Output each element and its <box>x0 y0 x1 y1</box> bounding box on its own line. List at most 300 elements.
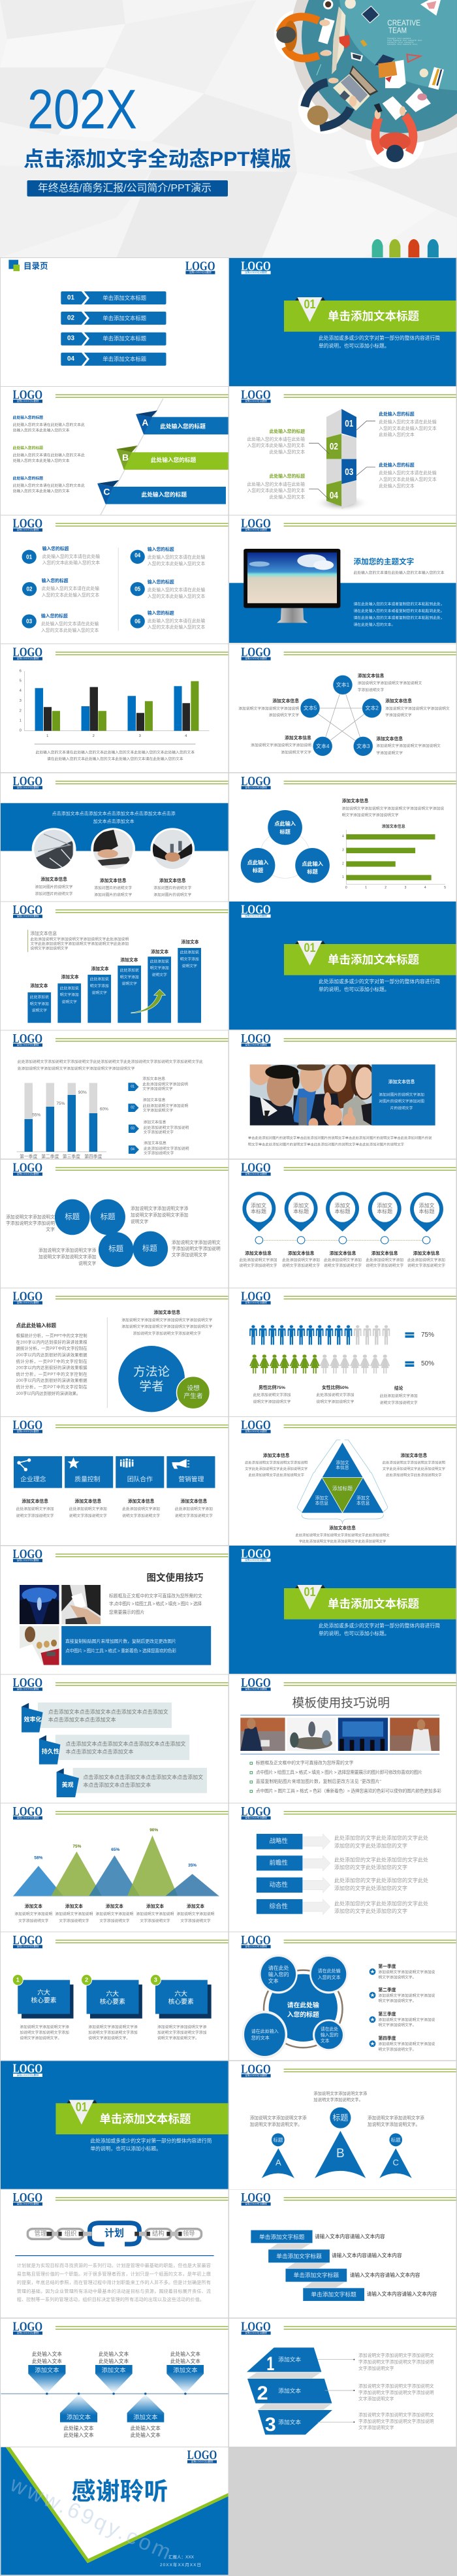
left article: 根据统计分析，一页PPT中的文字控制 <box>16 1333 87 1338</box>
pin labels: 添加文本 <box>133 2413 157 2421</box>
header <box>241 388 456 403</box>
circle labels <box>247 821 323 875</box>
header: 设有LOGO可以删除 <box>245 528 267 531</box>
mountain labels <box>14 1903 215 1923</box>
section content: 单的说明，也可以添加小标题。 <box>319 1630 390 1637</box>
header: 设有LOGO可以删除 <box>245 1043 267 1047</box>
methodology circles <box>107 1318 210 1412</box>
triangle labels <box>315 1459 370 1506</box>
ribbon text: 本点击添加文本点击添加文本 <box>48 1716 116 1723</box>
left text blocks: 此处输入您的文本请在此处输入您的文本此 <box>13 483 85 488</box>
monitor body text: 请在此处输入您的文本。 <box>354 622 395 627</box>
circle descriptions: 文字添加说明文字 <box>172 1252 207 1258</box>
circle numbers <box>26 552 140 625</box>
intro text: 此处添加说明文字添加说明文字添加说明文字此处添加说明文字此处添加说明文字添加说明文字添加说明文字此 <box>18 1059 203 1064</box>
header: LOGO <box>241 1933 271 1948</box>
panel: triangle slide <box>241 1418 456 1544</box>
percent labels: 60% <box>100 1107 108 1112</box>
panel: pentagram slide <box>238 645 456 756</box>
plan paragraph: 易忽略且管理价值的一个职能。对于很多管理者而言，计划只是一个纸面的文本，是年初上缴 <box>17 2271 211 2277</box>
cube text left: 入您的文本此处输入您的文本 <box>247 487 305 493</box>
flag labels: 此处输入您的标题 <box>151 456 197 463</box>
badge text: 文字添加说明文字 <box>143 1107 173 1113</box>
tile descriptions: 添加文本信息 <box>181 1498 207 1504</box>
card numbers: 3 <box>154 1977 157 1983</box>
pin labels: 本标题 <box>419 1208 435 1215</box>
step bar text: 此处添加说 <box>60 985 79 990</box>
photo info text: 添加对图片的说明文字添加 <box>379 1092 424 1097</box>
quarter list: 添加说明文字添加说明文字添加说 <box>378 1993 435 1998</box>
section logo: LOGO <box>241 259 271 273</box>
ribbon text: 本点击添加文本点击添加文本 <box>83 1782 151 1788</box>
ribbon text: 本点击添加文本点击添加文本 <box>65 1748 133 1755</box>
cover slide <box>0 0 457 257</box>
header <box>13 388 228 403</box>
timeline pins <box>1 2365 228 2422</box>
tile labels: 企业理念 <box>20 1475 46 1483</box>
panel: numbered blocks slide <box>241 2320 456 2436</box>
circle descriptions <box>6 1205 221 1266</box>
cluster labels: 入您的标题 <box>287 2010 319 2019</box>
header: 设有LOGO可以删除 <box>17 1172 39 1175</box>
step bar text: 说明文字 <box>92 990 107 995</box>
timeline text: 此处输入文本 <box>170 2351 200 2357</box>
pin descriptions: 添加文本信息 <box>245 1250 272 1256</box>
cube text right: 此处输入您的标题 <box>379 462 415 468</box>
card descriptions: 说明文字添加说明文字。 <box>88 2035 130 2040</box>
figure descriptions <box>250 2091 424 2127</box>
cube text left <box>247 429 305 500</box>
node descriptions: 添加说明文字添加说明文字添加说明 <box>251 743 311 748</box>
header <box>241 1290 456 1305</box>
circle descriptions: 文字 <box>46 1226 55 1232</box>
cluster labels: 文本 <box>268 1978 279 1984</box>
step titles <box>30 939 199 988</box>
quarter list: 添加说明文字添加说明文字添加说 <box>378 1969 435 1974</box>
circle labels: 点此输入 <box>247 859 268 866</box>
node labels: 文本2 <box>365 704 379 711</box>
section content: 单击添加文本标题 <box>328 953 419 966</box>
timeline text: 此处输入文本 <box>32 2351 62 2357</box>
header: LOGO <box>13 774 42 789</box>
photo captions: 添加文本信息 <box>159 877 186 883</box>
info text: 添加文本信息 <box>342 798 369 804</box>
monitor body text: 请在此处输入您的文本或者复制您的文本粘贴到此处， <box>354 615 445 620</box>
box labels: 前瞻性 <box>270 1859 289 1867</box>
block descriptions: 文字添加说明文字 <box>358 2396 394 2402</box>
header: LOGO <box>241 388 271 402</box>
tile descriptions <box>16 1498 213 1518</box>
left article: 在200字以内内达到很好的演讲效果根 <box>16 1339 87 1345</box>
step titles: 添加文本 <box>91 966 109 971</box>
right points text: 入您的文本此处输入您的文本 <box>148 593 205 599</box>
ribbon labels: 持久性 <box>42 1748 59 1755</box>
cluster labels: 请在此处输 <box>287 2000 319 2010</box>
triangle labels: 添加文 <box>315 1495 328 1501</box>
left text blocks: 此处输入您的文本请在此处输入您的文本此 <box>13 422 85 427</box>
triangle labels: 添加标题 <box>332 1485 353 1492</box>
step bar text: 此处添加说 <box>30 994 49 1000</box>
mountain labels: 文字添加说明文字 <box>99 1918 130 1923</box>
quarter labels: 第一季度 <box>20 1154 37 1159</box>
round photos <box>32 828 195 871</box>
badge text: 添加文本信息 <box>143 1098 166 1103</box>
section content <box>241 902 456 992</box>
panel: progress bars slide <box>13 1032 228 1159</box>
triangle labels: 添加文 <box>356 1495 370 1501</box>
stair labels: 单击添加文字标题 <box>294 2272 339 2279</box>
pin labels: 添加文本 <box>35 2366 59 2373</box>
quarter labels <box>20 1154 102 1159</box>
horizontal bar chart: 0 <box>345 886 347 890</box>
tips text: 字,点中图片 > 绘图工具 > 格式 > 填充 > 图片 > 选择 <box>109 1601 202 1606</box>
usage tips: 点中图片 > 绘图工具 > 格式 > 填充 > 图片 > 选择您需要展示的图片即可修改你喜欢的图片 <box>256 1769 422 1775</box>
header: 设有LOGO可以删除 <box>17 2202 39 2206</box>
timeline text: 此处输入文本 <box>131 2425 161 2432</box>
contents item 02 <box>61 311 166 325</box>
left article: 据统计分析，一页PPT中的文字控制在 <box>16 1345 87 1351</box>
panel: team photo slide <box>241 1032 456 1147</box>
pin descriptions: 此处添加说明文字添加 <box>366 1257 403 1262</box>
badge text: 此处添加说明文字添加说明 <box>144 1125 189 1130</box>
tips text: 标题框及正文框中的文字可直接改为您所需的文 <box>109 1593 202 1599</box>
cluster labels <box>251 1965 341 2044</box>
cluster labels: 输入您的 <box>268 1971 289 1978</box>
chain labels: 组织 <box>65 2230 76 2237</box>
circle labels: 标题 <box>108 1245 124 1253</box>
triangle descriptions: 添加文本信息 <box>263 1452 290 1458</box>
cube text right <box>379 411 437 489</box>
bar chart: 1 <box>20 719 22 723</box>
left points text: 此处输入您的文本请在此处输 <box>41 621 99 627</box>
cover subtitle bar <box>27 180 228 197</box>
quarter list <box>378 1963 435 2052</box>
header <box>241 645 456 660</box>
card labels: 核心要素 <box>31 1996 57 2004</box>
header: LOGO <box>241 2062 271 2077</box>
blue circles <box>55 1199 168 1267</box>
info text: 明文字添加说明文字添加说明文字 <box>342 813 399 818</box>
figure descriptions: 添加说明文字添加说明文字添 <box>313 2091 368 2096</box>
photo captions: 添加对图片的说明文字 <box>94 892 132 897</box>
tile labels: 团队合作 <box>127 1475 153 1483</box>
step bar text: 此处添加说 <box>180 950 199 955</box>
ratio captions: 女性比例50% <box>322 1384 349 1390</box>
timeline text: 此处输入文本 <box>63 2432 94 2438</box>
panel: column chart slide <box>13 645 228 762</box>
stair labels: 单击添加文字标题 <box>311 2291 356 2298</box>
circle labels: 标题 <box>307 868 318 875</box>
header: LOGO <box>241 1418 271 1433</box>
step bar text: 明文字添加 <box>30 1001 49 1006</box>
tile descriptions: 添加文本信息 <box>74 1498 101 1504</box>
chain labels <box>35 2228 195 2239</box>
panel: monitor slide <box>229 517 456 643</box>
timeline text <box>32 2351 200 2438</box>
header: LOGO <box>13 1032 42 1046</box>
header <box>241 2191 456 2206</box>
ratio captions: 此处添加说明文字添加 <box>316 1392 355 1397</box>
logo: 设有LOGO可以删除 <box>189 270 212 274</box>
tips text <box>109 1593 202 1615</box>
stair shapes <box>251 2230 364 2301</box>
panel: image tips slide <box>13 1547 228 1665</box>
section content: LOGO <box>13 2062 42 2076</box>
panel: stair steps slide <box>241 2191 456 2301</box>
right text: 添加说明文字添加说明文字添加说明文字添加说明文字 <box>121 1317 213 1322</box>
left points text <box>41 546 100 633</box>
cover subtitle bar: 年终总结/商务汇报/公司简介/PPT演示 <box>38 182 212 194</box>
node labels: 文本5 <box>304 704 317 711</box>
card labels: 六大 <box>174 1989 187 1998</box>
header: 设有LOGO可以删除 <box>17 399 39 402</box>
flag labels: C <box>103 486 110 497</box>
header: LOGO <box>13 1290 42 1304</box>
ribbon labels: 美观 <box>62 1781 74 1788</box>
step bar text: 说明文字 <box>182 963 197 968</box>
block labels: 1 <box>266 2353 274 2375</box>
triangle descriptions: 此处添加说明文字添加说明文字添加说明 <box>245 1460 307 1465</box>
triangle labels: 本信息 <box>356 1500 370 1506</box>
triangle descriptions: 此处添加说明文字此处添加说明文字 <box>386 1473 442 1478</box>
card descriptions: 添加说明文字添加说明文字添 <box>20 2025 69 2030</box>
arrow text: 添加您的文字此处添加您的文字 <box>334 1864 407 1870</box>
header: LOGO <box>13 1676 42 1690</box>
bar chart <box>20 669 210 744</box>
plan paragraph: 管理的基础，因为企业管理所有活动中最基本的活动是目标与资源，围绕着目标展开责任、流 <box>17 2288 211 2294</box>
triangle descriptions: 文字此处添加说明文字此处添加说明文字 <box>245 1466 307 1471</box>
header: 设有LOGO可以删除 <box>245 1816 267 1819</box>
numbered blocks <box>247 2347 355 2435</box>
figure labels: 标题 <box>391 2136 401 2143</box>
circle labels: 标题 <box>253 867 263 873</box>
header <box>241 1804 456 1819</box>
pin labels: 添加文 <box>377 1202 392 1209</box>
usage tips: 标题框及正文框中的文字可直接改为您所需的文字 <box>256 1760 354 1765</box>
cover year: 202X <box>27 78 137 141</box>
band text: 加文本点击添加文本 <box>93 818 134 824</box>
header <box>241 2320 456 2335</box>
pin descriptions: 说明文字添加说明文字 <box>240 1263 277 1268</box>
header <box>13 1032 228 1047</box>
panel: template usage slide <box>240 1676 456 1794</box>
presenter info: 20XX年XX月XX日 <box>160 2562 201 2568</box>
left points text: 此处输入您的文本请在此处输 <box>42 585 99 591</box>
card numbers: 2 <box>85 1977 88 1983</box>
quarter labels: 第四季度 <box>84 1154 102 1159</box>
horizontal bar chart: 1 <box>342 875 344 879</box>
header: LOGO <box>13 388 42 402</box>
step bar text: 明文字添加 <box>60 992 79 998</box>
left text blocks <box>13 415 85 493</box>
blue band <box>1 803 228 851</box>
panel: section divider 2 <box>229 902 456 1030</box>
right text: 添加文本信息 <box>153 1309 180 1315</box>
cube text right: 此处输入您的文本 <box>379 483 415 489</box>
section content: 单的说明，也可以添加小标题。 <box>90 2145 161 2152</box>
left article: 200字以内内达到很好的演讲效果。 <box>16 1390 80 1396</box>
node descriptions: 添加说明文字文字 <box>269 713 299 718</box>
pin labels <box>35 2366 198 2421</box>
cube text right: 入您的文本此处输入您的文本 <box>379 425 437 431</box>
pin descriptions: 说明文字添加说明文字 <box>366 1263 403 1268</box>
quarter list: 第二季度 <box>378 1987 396 1993</box>
circle numbers: 06 <box>134 618 140 625</box>
ribbon text: 点击添加文本点击添加文本点击添加文本点击添加文 <box>65 1740 185 1747</box>
pin descriptions: 添加文本信息 <box>413 1250 440 1256</box>
number circles <box>22 547 145 631</box>
photo info text: 添加文本信息 <box>388 1079 415 1084</box>
figure labels <box>273 2113 401 2168</box>
panel: people ratio slide <box>241 1290 456 1405</box>
band text: 点击添加文本点击添加文本点击添加文本点击添加文本点击添 <box>52 810 176 817</box>
team photo <box>249 1064 435 1126</box>
tile descriptions: 此处添加说明文字添加 <box>175 1507 213 1512</box>
section content: 此处添加或多或少的文字对第一部分的整体内容进行简 <box>319 978 440 985</box>
contents item 01: 单击添加文本标题 <box>102 295 147 301</box>
header: 设有LOGO可以删除 <box>245 2074 267 2077</box>
section title: 单击添加文本标题 <box>328 310 419 323</box>
cube text left: 此处输入您的文本 <box>270 449 305 455</box>
block labels <box>257 2353 301 2436</box>
photo captions: 添加对图片的说明文字 <box>153 892 191 897</box>
photo captions: 添加文本信息 <box>100 877 127 883</box>
presenter info <box>160 2554 201 2568</box>
header <box>241 1161 456 1176</box>
percent labels: 75% <box>56 1101 65 1106</box>
plan paragraph: 的提案，年底总结的参照，而在管理过程中用计划职能来工作的人并不多。但是计划确是所有 <box>17 2279 211 2285</box>
header: LOGO <box>13 2320 42 2334</box>
chain labels: 计划 <box>104 2228 124 2239</box>
node descriptions: 添加文本信息 <box>358 673 385 678</box>
panel: cube column slide <box>241 388 456 512</box>
cube text left: 入您的文本此处输入您的文本 <box>247 442 305 448</box>
badge numbers: 03 <box>131 1127 134 1131</box>
section content: 此处添加或多或少的文字对第一部分的整体内容进行简 <box>90 2138 212 2144</box>
header: LOGO <box>241 1290 271 1304</box>
slide heading: 图文使用技巧 <box>146 1572 204 1584</box>
header: LOGO <box>13 1804 42 1819</box>
usage tips: 点中图片 > 图片工具 > 格式 > 色彩（重新着色）> 选择您喜欢的色彩可以使你的图片颜色更加多彩 <box>256 1787 441 1794</box>
band text <box>52 810 176 824</box>
card numbers <box>16 1977 157 1983</box>
card descriptions: 加说明文字添加说明文字添加 <box>157 2030 207 2035</box>
illustration: team around round table <box>274 0 457 169</box>
figure labels: 标题 <box>332 2113 348 2123</box>
triangle descriptions: 添加文本信息 <box>401 1452 427 1458</box>
header <box>241 1418 456 1433</box>
card descriptions: 添加说明文字添加说明文字添 <box>157 2025 207 2030</box>
node descriptions: 字添加说明文字 <box>385 713 412 718</box>
arrow text: 此处添加您的文字此处添加您的文字此处 <box>334 1834 428 1841</box>
header: LOGO <box>13 517 42 531</box>
header <box>13 1804 228 1819</box>
badge numbers: 01 <box>131 1085 134 1089</box>
arrow text: 添加您的文字此处添加您的文字 <box>334 1842 407 1849</box>
badge text: 文字添加说明文字 <box>142 1086 173 1092</box>
box labels: 战略性 <box>270 1837 289 1845</box>
stair text: 请输入文本内容请输入文本内容 <box>350 2272 420 2278</box>
box labels: 动态性 <box>270 1881 289 1889</box>
panel: ABC figures slide <box>241 2062 456 2178</box>
section content: 此处添加或多或少的文字对第一部分的整体内容进行简 <box>319 1622 440 1629</box>
bar chart: 2 <box>93 734 95 738</box>
contents item 02: 02 <box>67 315 74 321</box>
triangle descriptions <box>245 1452 445 1544</box>
badge numbers: 02 <box>131 1106 134 1110</box>
photo captions: 添加对图片的说明文字 <box>35 885 73 890</box>
photo caption: 明文字单击此处添加对图片的说明文字单击此处添加对图片的说明文字单击此处添加对图片的说明文字 <box>248 1141 404 1147</box>
header: LOGO <box>13 1418 42 1433</box>
stair text: 请输入文本内容请输入文本内容 <box>315 2233 385 2240</box>
tile descriptions: 此处添加说明文字添加 <box>16 1507 54 1512</box>
ratio values: 50% <box>421 1360 434 1367</box>
cube text left: 此处输入您的文本 <box>270 494 305 500</box>
chart caption <box>36 749 195 762</box>
header: LOGO <box>241 1161 271 1175</box>
chain labels: 领导 <box>183 2230 195 2237</box>
section background <box>229 258 456 386</box>
card descriptions <box>20 2025 207 2040</box>
block descriptions: 字添加说明文字添加说明文字添加说明 <box>358 2390 434 2395</box>
cluster labels: 请在此处 <box>268 1965 289 1971</box>
pin descriptions <box>240 1250 445 1268</box>
stair text: 请输入文本内容请输入文本内容 <box>367 2291 437 2297</box>
mountain labels: 添加文本 <box>25 1903 42 1909</box>
photo info text <box>379 1079 424 1111</box>
header: 设有LOGO可以删除 <box>245 1301 267 1304</box>
bar chart: 0 <box>20 729 22 733</box>
peak percentages <box>34 1828 197 1868</box>
ratio captions: 此处添加说明文字添加 <box>253 1392 291 1397</box>
section triangle number: 01 <box>304 298 316 312</box>
header: LOGO <box>241 517 271 531</box>
triangle labels: 本信息 <box>315 1500 328 1506</box>
block descriptions: 字添加说明文字添加说明文字添加说明 <box>358 2419 434 2424</box>
node descriptions: 添加说明文字添加说明文字添加说明文 <box>358 681 422 686</box>
pin labels: 添加文 <box>293 1202 309 1209</box>
ribbon text: 点击添加文本点击添加文本点击添加文本点击添加文 <box>83 1774 203 1780</box>
mountain labels: 添加文本 <box>146 1903 164 1909</box>
cluster labels: 请在此处 <box>321 2026 338 2032</box>
plan paragraph <box>17 2262 211 2302</box>
left article: 统计分析，一页PPT中的文字控制在 <box>16 1371 87 1377</box>
tiles with icons <box>14 1456 215 1488</box>
cube numbers: 01 <box>345 418 353 429</box>
header: 设有LOGO可以删除 <box>245 1687 267 1691</box>
header: 设有LOGO可以删除 <box>245 786 267 789</box>
header: 设有LOGO可以删除 <box>17 1816 39 1819</box>
left points text: 入您的文本此处输入您的文本 <box>42 559 100 566</box>
circle numbers: 01 <box>26 553 32 560</box>
circle descriptions: 添加说明文字添加说明文 <box>172 1239 221 1245</box>
circle descriptions: 加说明文字添加说明文字添加 <box>39 1254 97 1260</box>
ratio captions: 男性比例75% <box>259 1384 285 1390</box>
header: LOGO <box>13 1547 42 1561</box>
right points text: 入您的文本此处输入您的文本 <box>148 561 205 566</box>
quarter list: 第四季度 <box>378 2035 396 2041</box>
header <box>13 903 228 918</box>
contents item 04 <box>61 352 166 367</box>
header <box>241 774 456 789</box>
right text: 添加说明文字添加说明文字添加说明文字添加说明文字 <box>121 1324 213 1329</box>
section content: 设有LOGO可以删除 <box>17 2074 39 2077</box>
horizontal bar chart: 1 <box>365 886 367 890</box>
horizontal bar chart: 3 <box>405 886 407 890</box>
badge text: 此处添加说明文字添加说明 <box>143 1103 188 1108</box>
header: 设有LOGO可以删除 <box>245 1945 267 1948</box>
left article: 200字以内内达到很好的演讲效果根据 <box>16 1364 87 1371</box>
